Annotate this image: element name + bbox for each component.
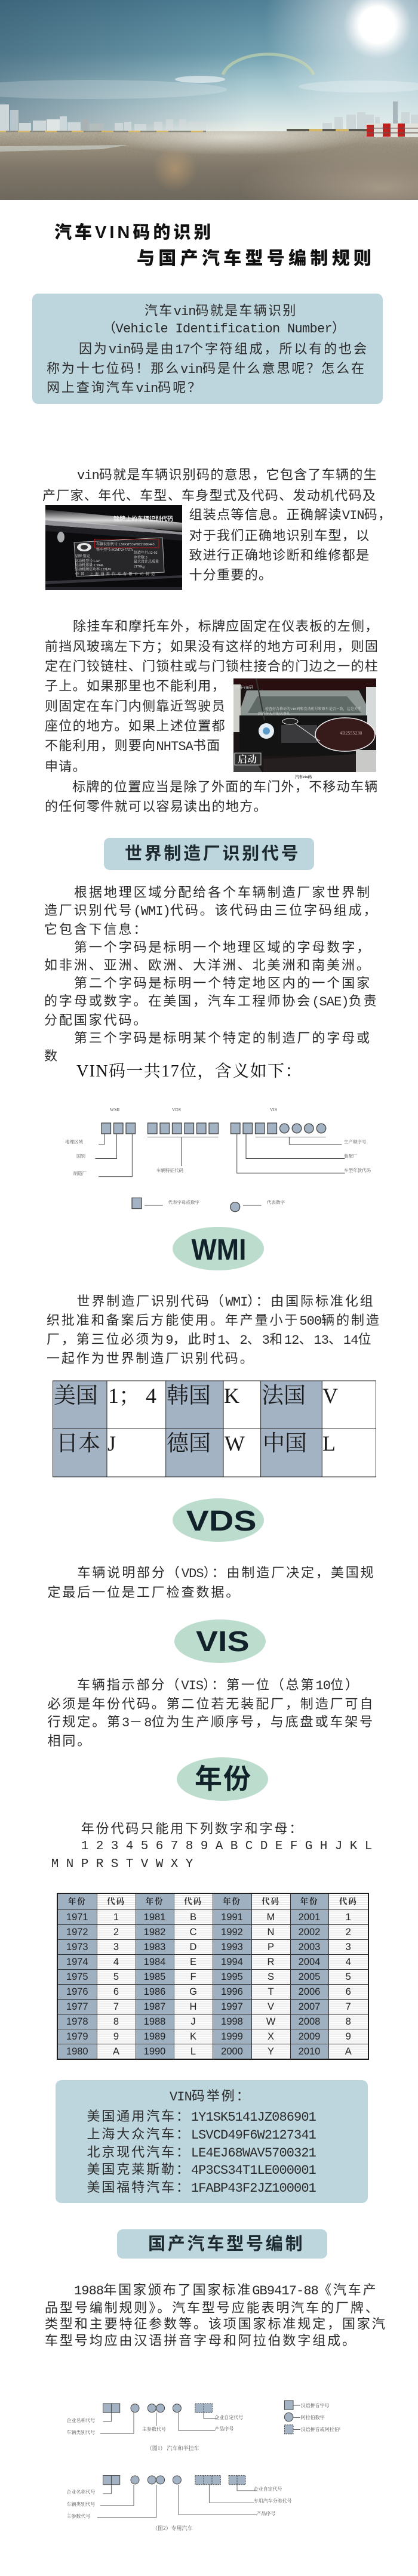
table: year codes: 1999 <box>221 2031 243 2042</box>
badge: WMI: WMI <box>191 1233 246 1266</box>
examples list: 美国克莱斯勒：4P3CS34T1LE000001 <box>87 2162 316 2178</box>
diagram labels <box>65 1107 371 1205</box>
table: year codes: 1995 <box>221 1972 243 1982</box>
paragraph: GB9417-88: 品型号编制规则》。汽车型号应能表明汽车的厂牌、 <box>45 2300 380 2315</box>
cell: France: 法国 <box>262 1384 306 1408</box>
paragraph: VIS detail: 相同。 <box>48 1733 92 1748</box>
figure 1 labels: 企业自定代号 <box>214 2414 243 2420</box>
diagram labels: 生产顺序号 <box>344 1139 367 1144</box>
paragraph: GB9417-88 <box>45 2282 387 2348</box>
table: year codes: R <box>268 1957 274 1967</box>
heading: world manufacturer identifier <box>104 838 314 870</box>
paragraph: plate location: 标牌的位置应当是除了外面的车门外，不移动车辆 <box>72 779 379 794</box>
diagram labels: 车辆特征代码 <box>156 1167 183 1173</box>
paragraph: plate location: 座位的地方。如果上述位置都 <box>45 718 226 733</box>
table: year codes: 1974 <box>66 1957 88 1967</box>
title line 2: 与国产汽车型号编制规则 <box>137 249 375 269</box>
paragraph: WMI explanation <box>44 885 379 1063</box>
table: year codes: 5 <box>346 1972 351 1982</box>
diagram labels: VIS <box>270 1107 277 1112</box>
table: year codes: 2001 <box>299 1912 320 1923</box>
paragraph beside nameplate <box>189 507 392 582</box>
legend <box>284 2401 349 2434</box>
figure 2 labels: 产品序号 <box>256 2510 275 2516</box>
table: year codes: 2000 <box>221 2046 243 2057</box>
table: year codes: 1 <box>113 1912 119 1923</box>
table: year codes: 7 <box>346 2001 351 2012</box>
panel paragraph: 网上查询汽车vin码呢？ <box>47 380 202 396</box>
paragraph: WMI explanation: 分配国家代码。 <box>44 1013 148 1028</box>
examples list: 北京现代汽车：LE4EJ68WAV5700321 <box>87 2145 316 2161</box>
table: year codes: 3 <box>113 1942 119 1952</box>
table: year codes: B <box>190 1912 196 1923</box>
figure 1 labels: 主参数代号 <box>142 2426 166 2432</box>
table: year codes: C <box>190 1927 196 1938</box>
paragraph: WMI explanation: 第三个字码是标明某个特定的制造厂的字母或 <box>74 1031 371 1045</box>
panel paragraph <box>47 341 368 396</box>
cell: Korea: 韩国 <box>167 1383 211 1408</box>
paragraph: WMI detail: 一起作为世界制造厂识别代码。 <box>47 1351 255 1366</box>
table: year codes: H <box>190 2001 196 2012</box>
diagram labels: 代表字母或数字 <box>168 1199 199 1205</box>
table: year codes: 1975 <box>66 1972 88 1982</box>
table: year codes: 1981 <box>144 1912 165 1923</box>
table: year codes: E <box>190 1957 196 1967</box>
table: year codes: 代码 <box>262 1897 280 1906</box>
diagram: domestic vehicle model numbering <box>66 2400 340 2531</box>
table: year codes: N <box>268 1927 274 1938</box>
heading text: 国产汽车型号编制 <box>148 2235 305 2254</box>
badge: VIS: VIS <box>196 1626 249 1658</box>
table: year codes: X <box>268 2031 274 2042</box>
paragraph: VIS detail: 车辆指示部分（VIS）：第一位（总第10位） <box>77 1677 360 1693</box>
plate text: displacement: 发动机排量:2.384L <box>75 563 104 567</box>
table: year codes: 2008 <box>299 2016 320 2027</box>
examples list: 上海大众汽车：LSVCD49F6W2127341 <box>87 2127 316 2143</box>
figure 2 connectors <box>97 2485 257 2518</box>
figure 1 labels: （图1） 汽车和半挂车 <box>147 2445 199 2451</box>
figure 1 connectors <box>100 2413 218 2433</box>
panel paragraph: 因为vin码是由17个字符组成，所以有的也会 <box>79 341 368 357</box>
table: year codes: 7 <box>113 2001 119 2012</box>
table: year codes: K <box>190 2031 196 2042</box>
cell: Japan code: J <box>107 1432 116 1455</box>
title line 1: 汽车VIN码的识别 <box>54 223 214 242</box>
paragraph: plate location: 子上。如果那里也不能利用， <box>45 678 226 693</box>
table: year codes: 1993 <box>221 1942 243 1952</box>
table: year codes: 代码 <box>184 1897 202 1906</box>
diagram labels: 国别 <box>76 1153 85 1159</box>
table: year codes: 1992 <box>221 1927 243 1938</box>
table: year codes: 2002 <box>299 1927 320 1938</box>
photo: vehicle nameplate <box>45 505 182 590</box>
table: year codes: 年份 <box>300 1897 319 1906</box>
badge: VDS: VDS <box>186 1506 257 1537</box>
paragraph: VDS detail: 定最后一位是工厂检查数据。 <box>48 1585 241 1599</box>
paragraph beside nameplate: 对于我们正确地识别车型，以 <box>189 527 370 543</box>
paragraph: plate location: 的任何零件就可以容易读出的地方。 <box>45 799 268 814</box>
plate text: VIN: 车辆识别代号:LSGGF53W8CH086445 <box>96 542 155 547</box>
paragraph: WMI explanation: 如非洲、亚洲、欧洲、大洋洲、北美洲和南美洲。 <box>44 958 371 973</box>
plate text: date: 制造年月:12-02 <box>134 550 158 555</box>
paragraph: plate location: 申请。 <box>45 759 87 774</box>
table: year codes: T <box>268 1986 274 1997</box>
table: year codes: 6 <box>346 1986 351 1997</box>
examples list <box>87 2109 316 2196</box>
table: year codes: 1991 <box>221 1912 243 1923</box>
paragraph: plate location: 除挂车和摩托车外，标牌应固定在仪表板的左侧， <box>73 619 379 634</box>
table: year codes: 1994 <box>221 1957 243 1967</box>
diagram labels: 制造厂 <box>73 1170 87 1176</box>
figure 2 labels: 主参数代号 <box>66 2513 90 2519</box>
badge: VIS <box>174 1619 266 1663</box>
paragraph: VDS detail: 车辆说明部分（VDS）：由制造厂决定，美国规 <box>78 1565 376 1581</box>
table: year codes: 1986 <box>144 1986 165 1997</box>
table: year codes: 1984 <box>144 1957 165 1967</box>
cell: Korea code: K <box>224 1384 239 1408</box>
table: year codes: 6 <box>113 1986 119 1997</box>
intro line: 年份代码只能用下列数字和字母： <box>81 1821 304 1835</box>
figure 2 labels <box>66 2486 292 2531</box>
legend: 汉语拼音字母 <box>301 2402 330 2408</box>
text: allowed year code characters <box>51 1821 372 1871</box>
paragraph: plate location: 则固定在车门内侧靠近驾驶员 <box>45 699 226 714</box>
diagram labels: 车型年款代码 <box>344 1167 371 1173</box>
legend: 阿拉伯数字 <box>301 2414 325 2420</box>
table: year codes: 1998 <box>221 2016 243 2027</box>
plate text: engine model: 发动机型号:LAF <box>75 559 101 563</box>
plate text: power: 发动机额定功率:137kW <box>75 567 112 572</box>
panel: what is a VIN <box>32 294 383 404</box>
paragraph: GB9417-88: 1988年国家颁布了国家标准GB9417-88《汽车产 <box>74 2282 378 2299</box>
table: year codes: Y <box>268 2046 274 2057</box>
table: year codes: 2006 <box>299 1986 320 1997</box>
examples list: 美国通用汽车：1Y1SK5141JZ086901 <box>87 2109 316 2125</box>
table: year codes: J <box>190 2016 196 2027</box>
cell: Germany code: W <box>225 1432 245 1455</box>
table: year codes: P <box>268 1942 274 1952</box>
table: year codes: 2004 <box>299 1957 320 1967</box>
table: year codes: 年份 <box>68 1897 87 1906</box>
paragraph: WMI detail: 世界制造厂识别代码（WMI）：由国际标准化组 <box>76 1294 375 1310</box>
paragraph: WMI explanation: 第一个字码是标明一个地理区域的字母数字， <box>74 940 371 955</box>
paragraph: WMI explanation: 造厂识别代号(WMI)代码。该代码由三位字码组成， <box>44 903 379 919</box>
diagram: VIN 17 digit structure <box>60 1049 371 1213</box>
table: year codes: 1989 <box>144 2031 165 2042</box>
table: year codes: 1990 <box>144 2046 165 2057</box>
paragraph: WMI detail: 织批准和备案后方能使用。年产量小于500辆的制造 <box>47 1313 381 1329</box>
table: year codes: 1985 <box>144 1972 165 1982</box>
table: year codes: A <box>113 2046 119 2057</box>
photo caption text: 铭牌上的车辆识别代码 <box>113 515 173 523</box>
table: year codes: 2003 <box>299 1942 320 1952</box>
examples heading: VIN码举例： <box>170 2088 251 2105</box>
figure 2 labels: 企业名称代号 <box>66 2489 95 2495</box>
table: year codes: 1987 <box>144 2001 165 2012</box>
plate text: seats: 座位数:5 <box>134 555 147 560</box>
panel text line: full name: （Vehicle Identification Number） <box>103 320 345 337</box>
VDS squares <box>148 1123 219 1134</box>
diagram labels: VDS <box>172 1107 181 1112</box>
paragraph: plate location <box>45 619 379 814</box>
figure 2 symbols <box>103 2476 245 2485</box>
table: year codes: S <box>268 1972 274 1982</box>
table: year codes: M <box>267 1912 275 1923</box>
badge text: 启动 <box>238 754 257 765</box>
photo watermark: 汽车vin码 <box>235 684 253 690</box>
paragraph: GB9417-88: 车型号均应由汉语拼音字母和阿拉伯数字组成。 <box>45 2333 357 2348</box>
table: year codes: 年份 <box>223 1897 241 1906</box>
diagram heading: VIN码一共17位，含义如下： <box>76 1062 303 1081</box>
paragraph: GB9417-88: 类型和主要特征参数等。该项国家标准规定，国家汽 <box>45 2316 387 2331</box>
paragraph: WMI detail <box>47 1294 381 1366</box>
table: year codes: 1997 <box>221 2001 243 2012</box>
table: year codes: 1979 <box>66 2031 88 2042</box>
plate text: mass: 最大设计总质量 <box>134 559 159 564</box>
connector lines <box>95 1134 345 1205</box>
table: year codes: 4 <box>346 1957 351 1967</box>
paragraph: plate location: 前挡风玻璃左下方；如果没有这样的地方可利用，则固 <box>45 639 379 654</box>
paragraph: WMI explanation: 第二个字码是标明一个特定地区内的一个国家 <box>74 976 371 991</box>
engine number: 4B2555230 <box>340 730 362 736</box>
figure 2 labels: 企业自定代号 <box>254 2486 282 2492</box>
VIS squares and circles <box>230 1123 326 1134</box>
photo caption line 2: 到新车入户的大事儿 <box>258 711 290 716</box>
table: year codes: 3 <box>346 1942 351 1952</box>
table: year codes: W <box>266 2016 275 2027</box>
paragraph beside nameplate: 组装点等信息。正确解读VIN码， <box>189 507 392 523</box>
table: year codes: G <box>189 1986 197 1997</box>
paragraph: WMI explanation: 它包含下信息： <box>44 922 148 937</box>
table: year codes: 1978 <box>66 2016 88 2027</box>
cell: USA: 美国 <box>54 1384 98 1408</box>
badge: WMI <box>173 1227 264 1270</box>
figure 1 labels <box>66 2414 243 2451</box>
main title <box>54 223 375 269</box>
paragraph: VIS detail: 必须是年份代码。第二位若无装配厂，制造厂可自 <box>48 1696 374 1711</box>
table: year codes: F <box>190 1972 196 1982</box>
cell: USA codes: 1； 4 <box>108 1384 156 1408</box>
table: year codes: 1977 <box>66 2001 88 2012</box>
table: year codes <box>57 1893 369 2060</box>
table: year codes: 8 <box>113 2016 119 2027</box>
cell: Japan: 日本 <box>56 1431 100 1456</box>
cell: China code: L <box>322 1432 336 1455</box>
table: year codes: D <box>190 1942 196 1952</box>
table: year codes: A <box>345 2046 352 2057</box>
heading: domestic model numbering <box>117 2229 327 2259</box>
character list line 1: 1 2 3 4 5 6 7 8 9 A B C D E F G H J K L <box>81 1839 372 1853</box>
paragraph: WMI explanation: 的字母或数字。在美国，汽车工程师协会(SAE)负责 <box>44 994 379 1010</box>
paragraph: VIS detail: 行规定。第3－8位为生产顺序号，与底盘或车架号 <box>48 1714 374 1730</box>
hero photo: racetrack skyline with sun and rainbow <box>0 0 418 200</box>
character list line 2: M N P R S T V W X Y <box>51 1857 193 1871</box>
table: country codes <box>53 1381 376 1477</box>
paragraph: plate location: 定在门铰链柱、门锁柱或与门锁柱接合的门边之一的柱 <box>45 659 379 674</box>
table: year codes: 代码 <box>107 1897 125 1906</box>
cell: France code: V <box>322 1384 338 1408</box>
table: year codes: 1983 <box>144 1942 165 1952</box>
table: year codes: 2 <box>346 1927 351 1938</box>
panel text line: 汽车vin码就是车辆识别 <box>145 303 297 319</box>
table: year codes: 年份 <box>146 1897 164 1906</box>
plate text: weight: 2170kg <box>134 565 145 569</box>
paragraph: VIN meaning: 产厂家、年代、车型、车身型式及代码、发动机代码及 <box>42 488 376 502</box>
panel: VIN examples <box>56 2080 368 2203</box>
table: year codes: V <box>268 2001 274 2012</box>
heading text: 世界制造厂识别代号 <box>125 844 300 863</box>
paragraph: VIS detail <box>48 1677 374 1748</box>
plate text: model: 整车型号:SGM7247ATA <box>96 547 134 552</box>
paragraph: plate location: 不能利用，则要向NHTSA书面 <box>45 738 221 754</box>
table: year codes: 2009 <box>299 2031 320 2042</box>
badge: VDS <box>173 1498 264 1542</box>
photo caption: 检查好合格证的VIN码和发动机号和原车是否一致，这是关乎 <box>265 707 361 711</box>
cell: China: 中国 <box>263 1431 307 1456</box>
examples list: 美国福特汽车：1FABP43F2JZ100001 <box>87 2180 316 2196</box>
table: year codes: 2007 <box>299 2001 320 2012</box>
paragraph: VDS detail <box>48 1565 376 1599</box>
paragraph: WMI explanation: 根据地理区域分配给各个车辆制造厂家世界制 <box>74 885 371 900</box>
cell: Germany: 德国 <box>167 1432 211 1456</box>
legend symbols <box>132 1198 240 1212</box>
photo: engine bay <box>233 678 376 779</box>
table: year codes: L <box>190 2046 196 2057</box>
table: year codes: 1971 <box>66 1912 88 1923</box>
badge: year: 年份 <box>195 1763 252 1794</box>
diagram labels: WMI <box>110 1107 120 1112</box>
paragraph: VIN meaning <box>42 467 377 502</box>
table: year codes: 2 <box>113 1927 119 1938</box>
paragraph: VIN meaning: vin码就是车辆识别码的意思，它包含了车辆的生 <box>77 467 377 483</box>
table: year codes: 1 <box>346 1912 351 1923</box>
table: year codes: 1982 <box>144 1927 165 1938</box>
table: year codes: 1976 <box>66 1986 88 1997</box>
diagram labels: 代表数字 <box>267 1199 285 1205</box>
plate text: brand: 品牌:别克 <box>75 554 90 559</box>
table: year codes: 1972 <box>66 1927 88 1938</box>
figure 1 labels: 车辆类别代号 <box>66 2429 95 2435</box>
table: year codes: 2010 <box>299 2046 320 2057</box>
WMI squares <box>102 1123 135 1134</box>
table: year codes: 5 <box>113 1972 119 1982</box>
table: year codes: 1988 <box>144 2016 165 2027</box>
diagram labels: 地理区域 <box>65 1139 83 1144</box>
paragraph: WMI detail: 厂，第三位必须为9，此时1、2、3和12、13、14位 <box>47 1332 373 1348</box>
badge: year <box>177 1757 268 1801</box>
figure 2 labels: （图2）专用汽车 <box>152 2525 193 2531</box>
table: year codes: 8 <box>346 2016 351 2027</box>
figure 2 labels: 车辆类别代号 <box>66 2501 95 2507</box>
table: year codes: 2005 <box>299 1972 320 1982</box>
paragraph beside nameplate: 十分重要的。 <box>189 567 272 582</box>
paragraph: WMI explanation: 数字。 <box>44 1048 89 1063</box>
table: year codes: 9 <box>346 2031 351 2042</box>
table: year codes: 9 <box>113 2031 119 2042</box>
figure 1 symbols <box>103 2404 212 2413</box>
plate text: manufacturer: 中国 上海通用汽车有限公司制造 <box>75 572 157 576</box>
table: year codes: 1996 <box>221 1986 243 1997</box>
panel paragraph: 称为十七位码！那么vin码是什么意思呢？怎么在 <box>47 360 366 377</box>
table: year codes: 4 <box>113 1957 119 1967</box>
figure 2 labels: 专用汽车分类代号 <box>254 2498 292 2504</box>
figure 1 labels: 企业名称代号 <box>66 2417 95 2423</box>
table: year codes: 1973 <box>66 1942 88 1952</box>
diagram labels: 装配厂 <box>344 1153 358 1159</box>
image caption: 汽车vin码 <box>295 774 312 779</box>
figure 1 labels: 产品序号 <box>214 2426 233 2432</box>
table: year codes: 1980 <box>66 2046 88 2057</box>
paragraph beside nameplate: 致进行正确地诊断和维修都是 <box>189 548 370 562</box>
table: year codes: 代码 <box>339 1897 358 1906</box>
